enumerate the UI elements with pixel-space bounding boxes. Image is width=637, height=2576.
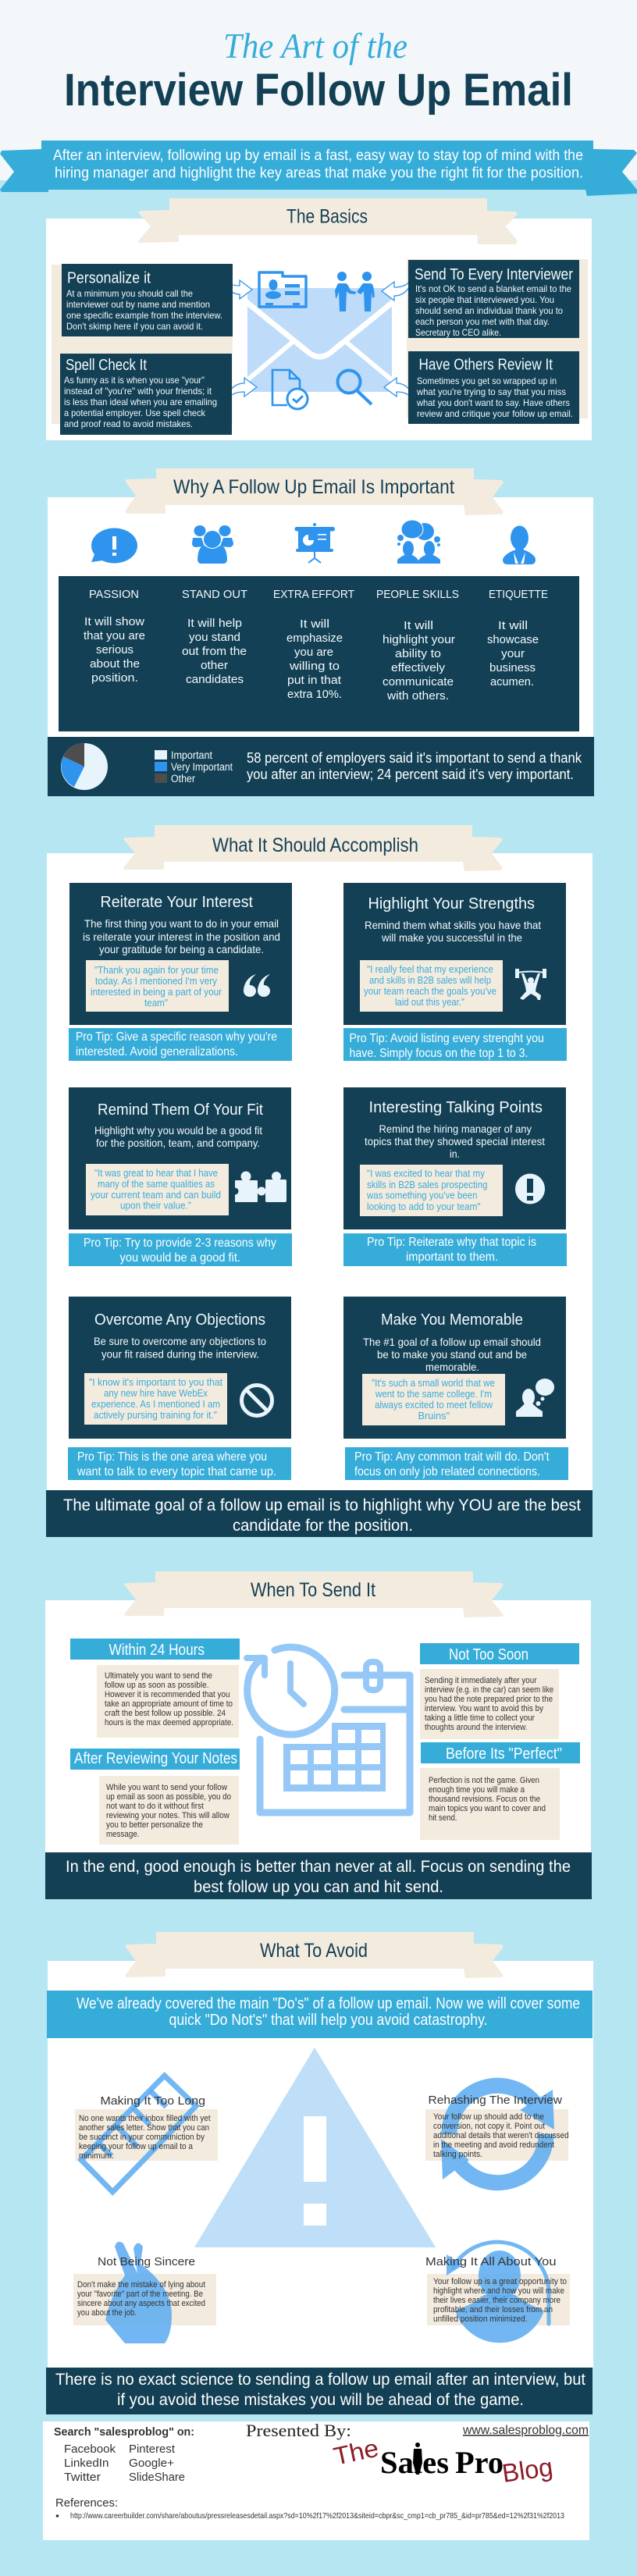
- card: interesting talking points: in.: [450, 1147, 460, 1160]
- card: remind them of your fit: [69, 1087, 291, 1229]
- block: after reviewing your notes: While you want to send your follow: [106, 1783, 227, 1792]
- card: reiterate your interest: [69, 883, 292, 1025]
- pro tip: [343, 1233, 567, 1266]
- callout: no exact science: There is no exact science to sending a follow up email after an interview, but: [55, 2371, 585, 2389]
- intro ribbon: hiring manager and highlight the key areas that make you the right fit for the position.: [55, 165, 583, 181]
- heading: when to send it: When To Send It: [251, 1579, 375, 1601]
- block: within 24 hours: follow up as soon as possible.: [105, 1681, 209, 1690]
- block: after reviewing your notes: you to better personalize the: [106, 1820, 203, 1830]
- block: making it too long: keeping your follow up email to a: [79, 2142, 194, 2151]
- block: not too soon: Sending it immediately after your: [425, 1676, 537, 1685]
- logo: the sales pro blog: Blog: [500, 2452, 554, 2488]
- social links: Facebook: [64, 2443, 116, 2456]
- block: not too soon: you had the note prepared prior to the: [425, 1695, 553, 1704]
- intro band: [47, 1991, 593, 2038]
- social links: Pinterest: [129, 2443, 176, 2456]
- icon: refresh arrows: [441, 2086, 554, 2183]
- card: reiterate your interest: your gratitude for being a candidate.: [99, 943, 264, 955]
- icon: presentation board: [295, 523, 335, 563]
- pro tip: [345, 1447, 568, 1480]
- block: after reviewing your notes: not want to do it without first: [106, 1802, 204, 1811]
- card: interesting talking points: Remind the hiring manager of any: [379, 1123, 532, 1135]
- quote box: many of the same qualities as: [98, 1179, 215, 1190]
- block: before its perfect: Before Its "Perfect": [446, 1745, 562, 1763]
- block: after reviewing your notes: message.: [106, 1830, 139, 1839]
- social links: Twitter: [64, 2471, 101, 2484]
- icon: magnifier: [337, 370, 372, 404]
- quote box: [360, 1165, 503, 1216]
- block: after reviewing your notes: reviewing your notes. This will allow: [106, 1811, 230, 1820]
- card: remind them of your fit: for the position, team, and company.: [96, 1137, 260, 1149]
- arrow: spell check: [226, 378, 257, 401]
- column: stand out: [182, 589, 247, 686]
- quote box: "Thank you again for your time: [94, 965, 219, 976]
- icon: group: [192, 525, 233, 564]
- column: passion: serious: [96, 643, 133, 656]
- column: stand out: It will help: [187, 617, 242, 630]
- callout: ultimate goal: candidate for the position.: [233, 1517, 413, 1535]
- icon: people skills: [397, 520, 440, 564]
- block: not too soon: thoughts around the interview.: [425, 1723, 528, 1732]
- heading: why: Why A Follow Up Email Is Important: [173, 476, 454, 498]
- column: extra effort: emphasize: [286, 632, 343, 645]
- text block: spell check it: and proof read to avoid mistakes.: [64, 418, 193, 429]
- quote box: "I really feel that my experience: [367, 964, 493, 975]
- arrow: send to every interviewer: [382, 276, 412, 301]
- legend: [155, 749, 233, 785]
- quote box: "It's such a small world that we: [372, 1378, 495, 1389]
- social links: Google+: [129, 2457, 174, 2470]
- column: people skills: communicate: [383, 675, 454, 688]
- quote box: and skills in B2B sales will help: [369, 975, 491, 986]
- card: interesting talking points: Interesting Talking Points: [368, 1099, 543, 1116]
- icon: warning triangle: [194, 2048, 436, 2247]
- pro tip: Pro Tip: Give a specific reason why you're: [76, 1030, 277, 1044]
- block: not being sincere: your "favorite" part of the meeting. Be: [77, 2290, 203, 2299]
- column: stand out: other: [201, 659, 228, 672]
- text block: send to every interviewer: each person you met with that day.: [415, 316, 550, 327]
- block: after reviewing your notes: [70, 1749, 240, 1845]
- callout: good enough: In the end, good enough is better than never at all. Focus on sending the: [66, 1858, 571, 1876]
- block: making it all about you: Your follow up is a great opportunity to: [433, 2277, 567, 2286]
- logo: the sales pro blog: The: [331, 2434, 381, 2471]
- card: make you memorable: [343, 1297, 566, 1439]
- column: people skills: PEOPLE SKILLS: [376, 589, 459, 601]
- title: Interview Follow Up Email: [64, 65, 573, 116]
- block: before its perfect: Perfection is not the game. Given: [429, 1776, 539, 1785]
- text block: have others review it: Sometimes you get so wrapped up in: [417, 375, 557, 386]
- card: overcome any objections: Be sure to overcome any objections to: [94, 1335, 266, 1347]
- card: interesting talking points: [343, 1087, 566, 1229]
- icon: envelope: [244, 288, 396, 392]
- block: rehashing the interview: conversion, not copy it. Point out: [433, 2122, 545, 2131]
- text block: spell check it: Spell Check It: [66, 357, 147, 374]
- pie chart: [61, 743, 108, 790]
- card: highlight your strengths: [343, 883, 566, 1025]
- legend: Other: [171, 773, 195, 785]
- references: http://www.careerbuilder.com/share/aboutus/pressreleasesdetail.aspx?sd=10%2f17%2f2013&siteid=cbpr&sc_cmp1=cb_pr785_&id=pr785&ed=12%2f31%2f2013: [70, 2511, 564, 2521]
- text block: have others review it: [408, 351, 579, 424]
- callout: good enough: best follow up you can and hit send.: [194, 1878, 443, 1896]
- title: [64, 26, 573, 116]
- text block: send to every interviewer: [408, 260, 579, 338]
- column: passion: about the: [90, 657, 140, 671]
- pro tip: Pro Tip: This is the one area where you: [77, 1450, 267, 1464]
- references: References:: [55, 2496, 118, 2510]
- quote box: [84, 1373, 227, 1425]
- icon: clock and calendar: [247, 1647, 410, 1813]
- card: reiterate your interest: is reiterate your interest in the position and: [83, 930, 280, 943]
- card: overcome any objections: Overcome Any Objections: [94, 1311, 265, 1329]
- quote box: "I know it's important to you that: [89, 1377, 223, 1388]
- block: making it too long: [79, 2094, 211, 2161]
- quote box: actively pursing training for it.": [94, 1410, 217, 1421]
- title: The Art of the: [223, 26, 407, 66]
- column: people skills: effectively: [391, 661, 446, 674]
- block: rehashing the interview: Rehashing The Interview: [428, 2094, 562, 2107]
- text block: have others review it: review and critique your follow up email.: [417, 408, 573, 419]
- heading: what to avoid: What To Avoid: [260, 1940, 368, 1962]
- quote box: interested in being a part of your: [91, 987, 222, 998]
- column: etiquette: [487, 589, 548, 688]
- card: reiterate your interest: The first thing you want to do in your email: [84, 917, 279, 930]
- card: make you memorable: be to make you stand out and be: [377, 1348, 527, 1361]
- icon: document with check: [272, 370, 308, 409]
- presented by: Presented By:: [246, 2421, 351, 2440]
- block: making it all about you: [425, 2255, 567, 2324]
- icon: contact card: [259, 272, 306, 307]
- block: not too soon: interview. You want to avoid this by: [425, 1704, 543, 1713]
- card: make you memorable: Make You Memorable: [381, 1311, 523, 1329]
- statistic text: 58 percent of employers said it's important to send a thank: [247, 750, 582, 766]
- text block: personalize it: one specific example from the interview.: [66, 310, 222, 321]
- social links: [54, 2425, 194, 2484]
- block: making it all about you: profitable, and their losses from an: [433, 2305, 553, 2314]
- website link: www.salesproblog.com: [462, 2424, 589, 2437]
- block: rehashing the interview: [428, 2094, 569, 2159]
- block: making it too long: Making It Too Long: [100, 2094, 205, 2108]
- block: making it too long: minimum.: [79, 2151, 114, 2161]
- block: rehashing the interview: talking points.: [433, 2150, 482, 2159]
- quote box: upon their value.": [120, 1201, 191, 1212]
- callout: no exact science: if you avoid these mistakes you will be ahead of the game.: [117, 2391, 524, 2409]
- text block: send to every interviewer: Secretary to CEO alike.: [415, 327, 501, 338]
- column: people skills: highlight your: [383, 633, 455, 646]
- intro ribbon: After an interview, following up by email is a fast, easy way to stay top of mind with the: [53, 148, 583, 164]
- pro tip: Pro Tip: Avoid listing every strenght you: [350, 1032, 544, 1045]
- logo: the sales pro blog: [331, 2434, 554, 2488]
- panel: when to send it: [45, 1571, 591, 1852]
- block: not being sincere: [77, 2255, 205, 2318]
- quote box: went to the same college. I'm: [375, 1389, 492, 1400]
- quote box: team": [144, 998, 168, 1009]
- icon: person in cycle: [447, 2242, 549, 2343]
- arrow: personalize: [222, 274, 252, 299]
- column: etiquette: acumen.: [490, 675, 534, 688]
- callout: no exact science: [46, 2368, 593, 2414]
- heading: what to avoid: [125, 1932, 504, 1978]
- text block: have others review it: Have Others Review It: [418, 356, 553, 373]
- heading: the basics: [138, 198, 518, 244]
- block: within 24 hours: Ultimately you want to send the: [105, 1671, 212, 1681]
- quote box: laid out this year.": [395, 997, 464, 1008]
- callout: ultimate goal: [46, 1490, 593, 1537]
- statistic text: you after an interview; 24 percent said it's very important.: [247, 767, 574, 782]
- pro tip: Pro Tip: Any common trait will do. Don't: [354, 1450, 550, 1464]
- pro tip: focus on only job related connections.: [354, 1465, 540, 1478]
- logo: the sales pro blog: Sales: [380, 2445, 449, 2480]
- text block: spell check it: [60, 354, 232, 435]
- legend: Very Important: [171, 761, 233, 773]
- quote box: "I was excited to hear that my: [367, 1168, 486, 1179]
- heading: what it should accomplish: What It Should Accomplish: [212, 834, 418, 856]
- heading: what it should accomplish: [123, 825, 503, 871]
- pro tip: [68, 1447, 291, 1480]
- arrow: others review: [384, 378, 414, 401]
- text block: personalize it: At a minimum you should call the: [66, 288, 193, 299]
- pro tip: [343, 1028, 567, 1061]
- text block: spell check it: a potential employer. Use spell check: [64, 407, 206, 418]
- block: within 24 hours: craft the best follow up possible. 24: [105, 1709, 226, 1718]
- pro tip: [69, 1028, 292, 1061]
- block: rehashing the interview: additional details that weren't discussed: [433, 2131, 569, 2140]
- block: before its perfect: main topics you want to cover and: [429, 1804, 546, 1813]
- icon: alert bubble: [91, 528, 137, 564]
- panel: five reasons: [59, 576, 579, 731]
- pro tip: have. Simply focus on the top 1 to 3.: [350, 1047, 528, 1060]
- card: highlight your strengths: Remind them what skills you have that: [365, 919, 541, 931]
- column: people skills: with others.: [386, 689, 449, 703]
- column: passion: that you are: [84, 629, 145, 642]
- column: etiquette: your: [501, 647, 525, 660]
- text block: send to every interviewer: It's not OK to send a blanket email to the: [415, 283, 571, 294]
- column: extra effort: [273, 589, 354, 701]
- text block: spell check it: As funny as it is when you use "your": [64, 375, 205, 386]
- callout: ultimate goal: The ultimate goal of a follow up email is to highlight why YOU are the best: [63, 1496, 581, 1514]
- block: before its perfect: hit send.: [429, 1813, 457, 1823]
- block: not too soon: interview (e.g. in the car) can seem like: [425, 1685, 553, 1695]
- column: extra effort: It will: [300, 617, 329, 631]
- block: within 24 hours: However it is recommended that you: [105, 1690, 230, 1699]
- quote box: skills in B2B sales prospecting: [367, 1179, 488, 1190]
- column: passion: PASSION: [89, 589, 139, 601]
- card: highlight your strengths: will make you successful in the: [381, 931, 522, 944]
- quote box: always excited to meet fellow: [375, 1400, 493, 1411]
- pro tip: Pro Tip: Reiterate why that topic is: [367, 1236, 536, 1249]
- icon: etiquette: [503, 526, 536, 564]
- panel: what it should accomplish: [47, 825, 593, 1490]
- column: people skills: [376, 589, 459, 703]
- panel: statistic band: [48, 737, 594, 796]
- intro band: quick "Do Not's" that will help you avoid catastrophy.: [169, 2012, 487, 2029]
- column: extra effort: put in that: [287, 674, 342, 687]
- heading: when to send it: [124, 1571, 504, 1617]
- icon: two people: [335, 272, 375, 311]
- text block: have others review it: what you're trying to say that you miss: [416, 386, 566, 397]
- text block: personalize it: [62, 264, 233, 336]
- block: after reviewing your notes: up email as soon as possible, you do: [106, 1792, 231, 1802]
- quote box: [360, 960, 503, 1012]
- text block: have others review it: what you don't want to say. Have others: [416, 397, 570, 408]
- quote box: experience. As I mentioned I am: [91, 1399, 220, 1410]
- block: not being sincere: Not Being Sincere: [98, 2255, 195, 2268]
- callout: good enough: [45, 1852, 592, 1899]
- column: stand out: out from the: [182, 645, 247, 658]
- text block: send to every interviewer: six people that interviewed you. You: [415, 294, 554, 305]
- block: rehashing the interview: in the meeting and avoid redundent: [433, 2140, 554, 2150]
- column: stand out: you stand: [189, 631, 240, 644]
- quote box: any new hire have WebEx: [104, 1388, 208, 1399]
- block: before its perfect: enough time you will make a: [429, 1785, 525, 1795]
- block: before its perfect: thousand revisions. Focus on the: [429, 1795, 540, 1804]
- statistic text: [247, 750, 582, 782]
- pro tip: you would be a good fit.: [120, 1251, 240, 1265]
- pro tip: [69, 1233, 292, 1266]
- block: not too soon: Not Too Soon: [449, 1646, 528, 1663]
- card: remind them of your fit: Remind Them Of Your Fit: [98, 1101, 263, 1119]
- panel: the basics: [46, 198, 592, 440]
- block: rehashing the interview: Your follow up should add to the: [433, 2112, 544, 2122]
- column: etiquette: showcase: [487, 633, 539, 646]
- block: making it all about you: their lives easier, their company more: [433, 2296, 560, 2305]
- block: not being sincere: you about the job.: [77, 2308, 137, 2318]
- quote box: [86, 1164, 229, 1215]
- text block: personalize it: Personalize it: [67, 270, 151, 287]
- text block: send to every interviewer: Send To Every Interviewer: [415, 266, 573, 283]
- text block: spell check it: is less than ideal when you are emailing: [64, 397, 217, 407]
- block: within 24 hours: hours is the max deemed appropriate.: [105, 1718, 233, 1727]
- column: people skills: ability to: [395, 647, 441, 660]
- social links: SlideShare: [129, 2471, 185, 2484]
- quote box: [362, 1374, 505, 1425]
- heading: the basics: The Basics: [286, 206, 368, 228]
- column: passion: position.: [91, 671, 138, 685]
- quote box: today. As I mentioned I'm very: [95, 976, 218, 987]
- icon: prohibited sign: [242, 1385, 272, 1416]
- column: passion: It will show: [84, 615, 144, 628]
- pro tip: important to them.: [406, 1251, 498, 1264]
- quote box: Bruins": [418, 1411, 450, 1421]
- card: remind them of your fit: Highlight why you would be a good fit: [94, 1124, 262, 1137]
- legend: Important: [171, 749, 212, 761]
- column: extra effort: you are: [294, 646, 333, 659]
- column: passion: [84, 589, 145, 685]
- quote box: [86, 960, 229, 1012]
- text block: send to every interviewer: should send an individual thank you to: [415, 305, 563, 316]
- quote box: your team reach the goals you've: [364, 986, 496, 997]
- quote box: was something you've been: [366, 1190, 478, 1201]
- heading: why: [125, 468, 504, 515]
- quote box: "It was great to hear that I have: [94, 1168, 218, 1179]
- icon: thinking head: [516, 1379, 554, 1417]
- quote box: your current team and can build: [91, 1190, 221, 1201]
- column: stand out: candidates: [186, 673, 244, 686]
- column: people skills: It will: [404, 619, 433, 632]
- intro ribbon: [0, 141, 637, 212]
- card: highlight your strengths: Highlight Your Strengths: [368, 895, 535, 913]
- column: etiquette: It will: [498, 619, 528, 632]
- card: make you memorable: The #1 goal of a follow up email should: [363, 1336, 541, 1348]
- panel: what to avoid: [47, 1932, 593, 2368]
- block: making it too long: No one wants their inbox filled with yet: [79, 2114, 211, 2123]
- text block: personalize it: Don't skimp here if you can avoid it.: [66, 321, 203, 332]
- social links: LinkedIn: [64, 2457, 109, 2470]
- icon: quotation mark: [244, 974, 270, 997]
- column: etiquette: business: [489, 661, 536, 674]
- block: not too soon: taking a little time to collect your: [425, 1713, 535, 1723]
- block: within 24 hours: [70, 1638, 240, 1738]
- icon: exclamation circle: [515, 1174, 545, 1204]
- icon: crossed fingers: [105, 2242, 172, 2343]
- block: not too soon: [420, 1643, 579, 1739]
- block: not being sincere: sincere about any aspects that excited: [77, 2299, 205, 2308]
- card: make you memorable: memorable.: [425, 1361, 479, 1373]
- pro tip: Pro Tip: Try to provide 2-3 reasons why: [84, 1236, 276, 1250]
- icon: puzzle pieces: [231, 1171, 286, 1202]
- column: extra effort: EXTRA EFFORT: [273, 589, 354, 601]
- quote box: looking to add to your team": [367, 1201, 481, 1212]
- panel: why a follow up email is important: [48, 468, 593, 737]
- block: making it all about you: unfilled position minimized.: [433, 2314, 528, 2324]
- block: not being sincere: Don't make the mistake of lying about: [77, 2280, 205, 2290]
- card: overcome any objections: your fit raised during the interview.: [101, 1347, 259, 1360]
- column: extra effort: extra 10%.: [287, 688, 342, 701]
- block: within 24 hours: Within 24 Hours: [109, 1642, 205, 1659]
- column: etiquette: ETIQUETTE: [489, 589, 548, 601]
- block: before its perfect: [420, 1742, 580, 1840]
- block: within 24 hours: take an appropriate amount of time to: [105, 1699, 233, 1709]
- block: making it too long: another sales letter. Show that you can: [79, 2123, 209, 2133]
- block: making it too long: be succinct in your communiction by: [79, 2133, 205, 2142]
- text block: personalize it: interviewer out by name and mention: [66, 299, 210, 310]
- pro tip: interested. Avoid generalizations.: [76, 1045, 238, 1059]
- text block: spell check it: instead of "you're" with your friends; it: [64, 386, 212, 397]
- icon: weightlifter: [515, 969, 546, 1000]
- column: stand out: STAND OUT: [182, 589, 247, 601]
- pro tip: want to talk to every topic that came up.: [77, 1465, 276, 1478]
- panel: footer: [43, 2421, 589, 2540]
- block: making it all about you: highlight where and how you will make: [433, 2286, 564, 2296]
- block: making it all about you: Making It All About You: [425, 2255, 556, 2268]
- card: reiterate your interest: Reiterate Your Interest: [100, 894, 253, 911]
- social links: Search "salesproblog" on:: [54, 2425, 194, 2439]
- card: interesting talking points: topics that they showed special interest: [365, 1135, 545, 1147]
- references: [55, 2496, 564, 2521]
- card: overcome any objections: [69, 1297, 291, 1439]
- column: extra effort: willing to: [289, 660, 340, 673]
- logo: the sales pro blog: Pro: [455, 2445, 504, 2480]
- block: after reviewing your notes: After Reviewing Your Notes: [74, 1750, 237, 1767]
- icon: ruler: [81, 2076, 196, 2192]
